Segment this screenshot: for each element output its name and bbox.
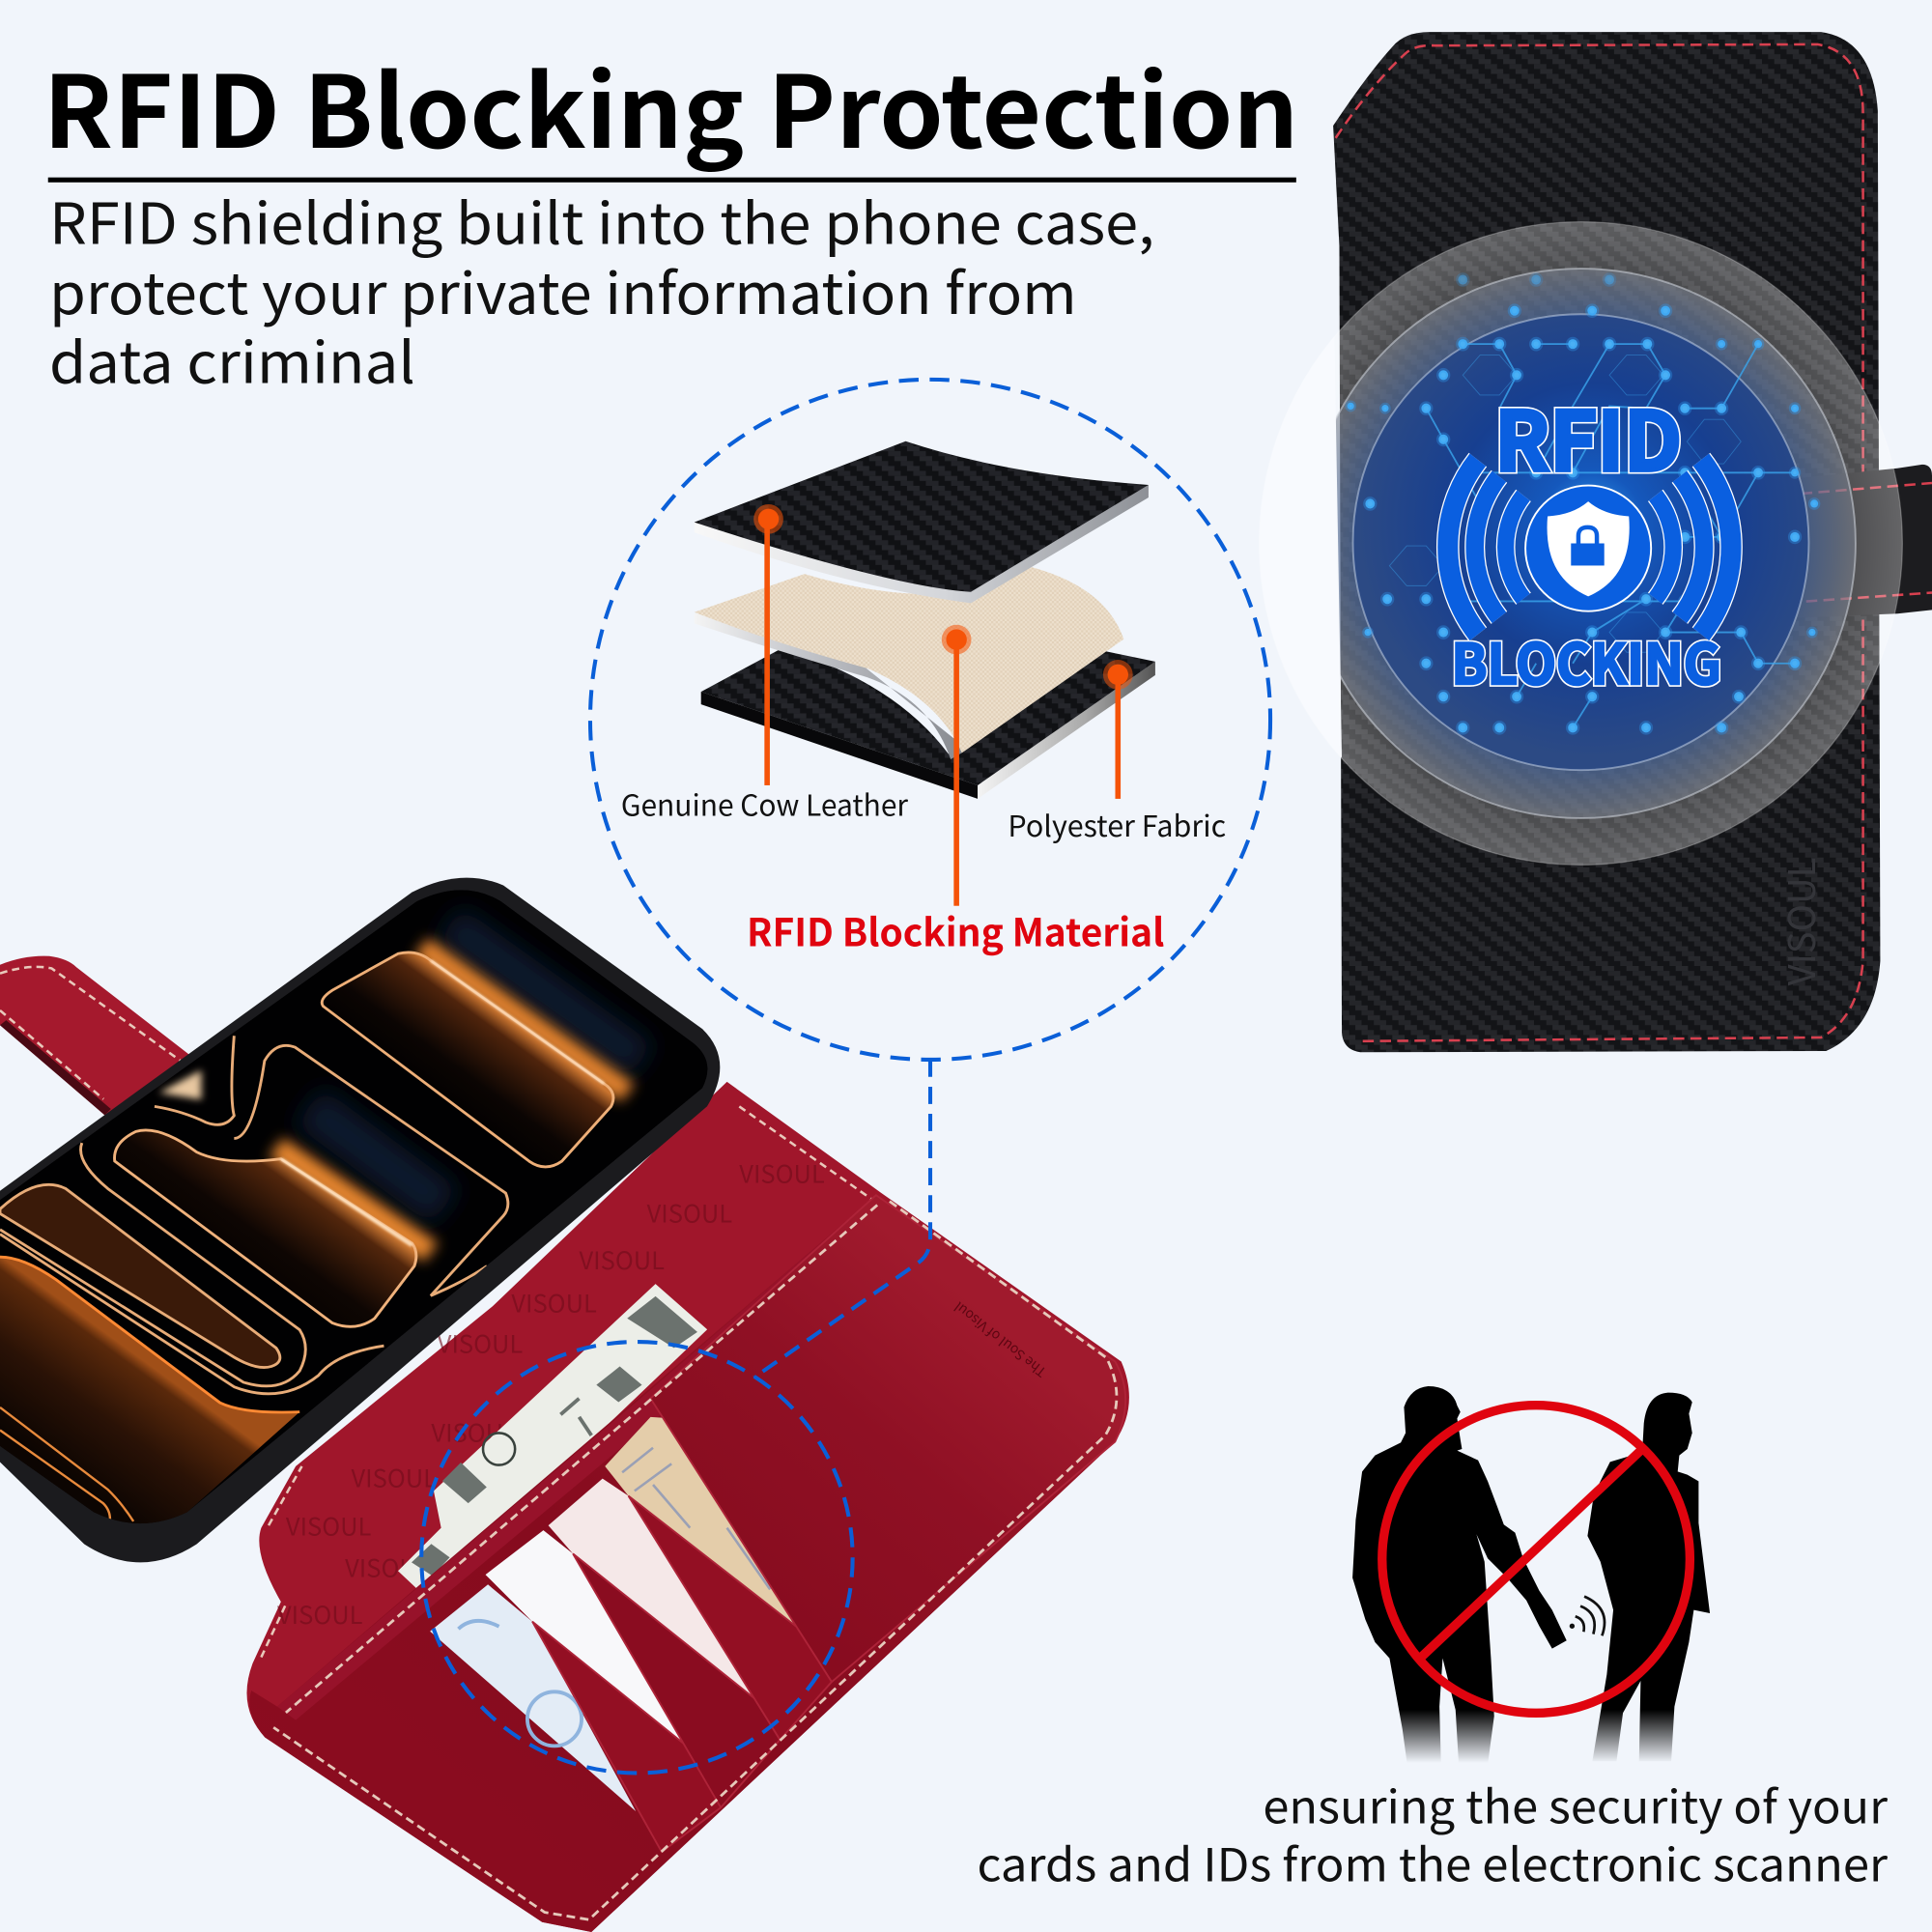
closure strap (1749, 465, 1932, 620)
middle ring (1306, 269, 1856, 818)
shield (1548, 501, 1630, 596)
card: tan (605, 1417, 813, 1641)
phone body (0, 878, 720, 1562)
label: cow leather: Genuine Cow Leather (621, 781, 908, 824)
phone screen (0, 890, 707, 1523)
card: pink white (549, 1479, 755, 1699)
badge text: BLOCKING: BLOCKING (1452, 619, 1721, 700)
wallet interior lining: VISOUL (286, 1507, 372, 1543)
middle panel (115, 1130, 416, 1326)
card slot wedges (532, 1195, 1125, 1852)
inner blue core (1353, 314, 1808, 770)
circuit network (1348, 274, 1818, 732)
dashed card circle (421, 1342, 853, 1773)
case brand text: VISOUL (1774, 858, 1827, 985)
wallet interior lining: VISOUL (352, 1460, 437, 1495)
card: tan detail (622, 1448, 770, 1589)
prohibition sign (1382, 1406, 1690, 1713)
case body (1333, 32, 1880, 1052)
material layers callout (590, 380, 1270, 1060)
closing text block: cards and IDs from the electronic scanner (977, 1829, 1889, 1895)
front pocket panel (249, 1195, 1125, 1932)
pocket brand text: The Soul of Visoul (951, 1297, 1050, 1381)
cards in slots (430, 1417, 813, 1811)
no skimming illustration (1352, 1386, 1710, 1765)
wallet interior lining: VISOUL (431, 1413, 517, 1449)
wallet interior lining: VISOUL (277, 1596, 363, 1632)
dashed circle (590, 380, 1270, 1060)
wallet interior lining: VISOUL (511, 1284, 597, 1320)
intro text block: data criminal (49, 318, 415, 400)
closing text block (977, 1771, 1889, 1895)
intro text block (49, 179, 1154, 400)
nested band (0, 1184, 280, 1368)
banknotes (398, 1284, 707, 1591)
closing text block: ensuring the security of your (1263, 1771, 1889, 1837)
shield disc (1525, 486, 1651, 611)
wallet interior lining (246, 1082, 1129, 1932)
RFID signal rings (1260, 222, 1902, 865)
black carbon phone case (1333, 32, 1932, 1052)
wave contours (0, 1036, 508, 1394)
wallet interior lining: VISOUL (345, 1549, 431, 1585)
card blue detail (458, 1621, 582, 1746)
signal arcs (1448, 460, 1731, 635)
white glow over background (1260, 336, 1342, 757)
label: RFID blocking material: RFID Blocking Material (747, 903, 1164, 958)
wallet interior lining: VISOUL (647, 1194, 732, 1230)
intro text block: RFID shielding built into the phone case, (49, 179, 1154, 261)
title underline (48, 178, 1296, 183)
phone (0, 878, 720, 1562)
bottom layer: polyester fabric (701, 648, 1155, 799)
exploded material layers (695, 441, 1155, 906)
left silhouette (1352, 1386, 1567, 1765)
outer ring (1260, 222, 1902, 865)
dashed connector (754, 1060, 930, 1378)
top layer: cow leather (695, 441, 1149, 603)
upper panel (322, 952, 613, 1167)
card: white (486, 1530, 692, 1749)
card: blue white (430, 1584, 636, 1811)
signal icon (1570, 1597, 1605, 1635)
red wallet with phone (0, 878, 1129, 1932)
right silhouette (1587, 1393, 1710, 1761)
wallet strap tab (0, 956, 191, 1115)
leader lines (753, 504, 1133, 906)
intro text block: protect your private information from (49, 248, 1077, 330)
upper glow (449, 924, 641, 1061)
label: polyester: Polyester Fabric (1008, 803, 1226, 845)
RFID blocking badge (1448, 377, 1731, 700)
wallet interior lining: VISOUL (739, 1154, 825, 1190)
case stitching (1336, 44, 1863, 1041)
stitching (273, 1202, 1117, 1919)
lower left panel (0, 1257, 299, 1523)
badge text: RFID: RFID (1494, 377, 1682, 495)
padlock (1571, 527, 1605, 565)
title: RFID Blocking Protection (43, 32, 1298, 177)
middle layer: RFID blocking material (695, 567, 1123, 759)
badge text: RFID: RFID (1494, 377, 1682, 495)
badge text: BLOCKING: BLOCKING (1452, 619, 1721, 700)
wallet interior lining: VISOUL (579, 1241, 665, 1277)
wallet interior lining: VISOUL (438, 1325, 523, 1361)
